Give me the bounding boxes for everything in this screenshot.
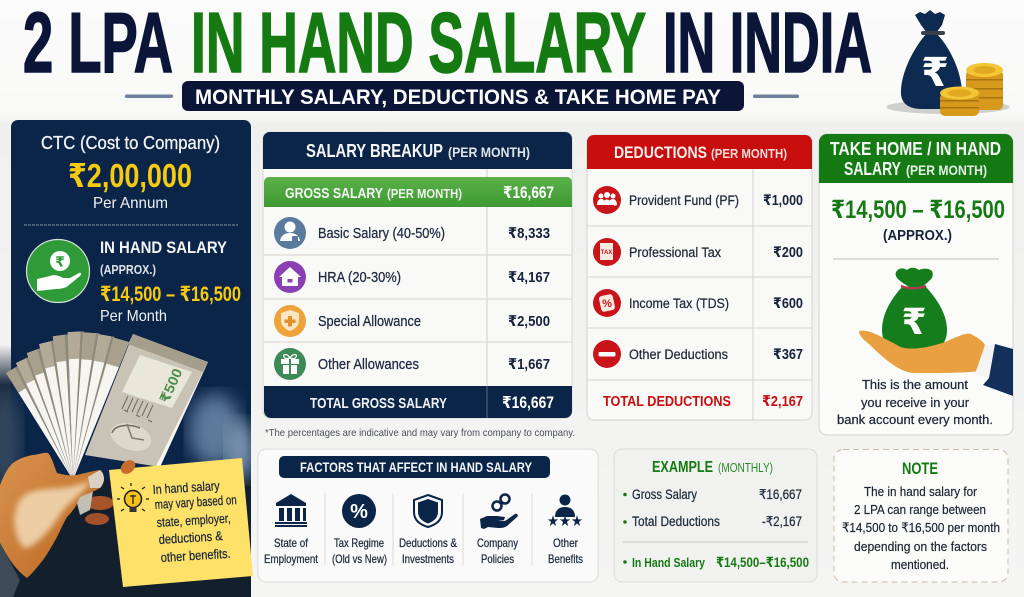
row: other deductions: Other Deductions: [629, 347, 728, 362]
callout: sticky note: other benefits.: [160, 546, 231, 565]
panel: monthly example: In Hand Salary: [632, 555, 706, 570]
factor: state of employment: [264, 494, 319, 566]
heading: [263, 132, 572, 169]
factor: company policies: Policies: [481, 552, 514, 566]
row: income tax: %: [602, 298, 612, 310]
heading: (PER MONTH): [906, 162, 987, 178]
row: income tax: [593, 289, 803, 317]
icon: hand with rupee: [26, 240, 90, 302]
row: other allowances: [274, 348, 550, 380]
factor: other benefits: [547, 494, 583, 566]
callout: sticky note: state, employer,: [156, 511, 231, 530]
total deductions row: [603, 393, 803, 410]
heading: (PER MONTH): [711, 146, 787, 161]
row: provident fund: ₹1,000: [763, 193, 803, 209]
panel: note: NOTE: [902, 459, 938, 478]
factor: company policies: Company: [477, 536, 518, 550]
panel: take home salary: [819, 134, 1013, 435]
heading: FACTORS THAT AFFECT IN HAND SALARY: [300, 460, 532, 475]
row: other allowances: Other Allowances: [318, 357, 419, 373]
panel: CTC and in hand summary: CTC (Cost to Company): [41, 132, 220, 153]
callout: sticky note: deductions &: [158, 528, 223, 547]
panel: monthly example: Gross Salary: [632, 487, 697, 502]
illustration: fan of rupee notes: ₹500: [156, 366, 185, 405]
callout: sticky note: may vary based on: [154, 492, 237, 512]
panel: monthly example: [614, 449, 817, 582]
panel: monthly example: EXAMPLE: [652, 459, 713, 476]
panel: CTC and in hand summary: IN HAND SALARY: [100, 238, 228, 257]
factor: tax regime: %: [350, 501, 368, 523]
factor: other benefits: ★★★: [547, 513, 583, 530]
panel: take home salary: (APPROX.): [883, 227, 952, 244]
row: basic salary: Basic Salary (40-50%): [318, 226, 445, 242]
factor: tax regime: Tax Regime: [334, 536, 384, 550]
heading: TAKE HOME / IN HAND: [830, 139, 1001, 159]
subtitle banner: [125, 81, 799, 111]
gross salary row: [264, 177, 572, 207]
panel: note: ₹14,500 to ₹16,500 per month: [842, 520, 1000, 535]
panel: monthly example: -₹2,167: [762, 514, 802, 529]
illustration: hand holding notes: [0, 453, 114, 597]
panel: CTC and in hand summary: ₹2,00,000: [68, 157, 192, 194]
panel: take home salary: bank account every month.: [837, 412, 993, 427]
gross salary row: (PER MONTH): [387, 187, 462, 201]
heading: SALARY: [844, 159, 901, 179]
panel: note: The in hand salary for: [864, 484, 978, 499]
panel: CTC and in hand summary: [0, 120, 254, 597]
row: provident fund: [593, 186, 803, 214]
panel: take home salary: you receive in your: [861, 395, 970, 410]
heading: DEDUCTIONS: [614, 143, 707, 162]
row: professional tax: [593, 238, 803, 266]
panel: note: 2 LPA can range between: [854, 502, 986, 517]
illustration: hand holding green money bag: ₹: [901, 301, 927, 342]
row: income tax: Income Tax (TDS): [629, 296, 729, 311]
factor: other benefits: Other: [553, 536, 578, 550]
heading: SALARY BREAKUP: [306, 141, 443, 161]
panel: monthly example: ₹14,500–₹16,500: [716, 554, 809, 570]
footnote: *The percentages are indicative and may vary from company to company.: [265, 427, 575, 439]
photo background: [0, 345, 254, 597]
icon: money bag with coins: [886, 10, 1010, 116]
total deductions row: ₹2,167: [762, 393, 803, 410]
row: special allowance: Special Allowance: [318, 314, 421, 330]
total gross row: TOTAL GROSS SALARY: [310, 395, 447, 412]
heading: [587, 135, 812, 169]
callout: sticky note: [109, 457, 253, 587]
row: special allowance: ₹2,500: [508, 313, 550, 330]
factor: deductions and investments: Investments: [402, 552, 454, 566]
row: other allowances: ₹1,667: [508, 356, 550, 373]
gross salary row: GROSS SALARY: [285, 185, 383, 202]
icon: hand with rupee: ₹: [55, 254, 65, 270]
panel: factors: [258, 449, 598, 582]
panel: monthly example: ₹16,667: [759, 487, 802, 502]
portrait on note: [107, 418, 155, 456]
row: other deductions: ₹367: [773, 347, 803, 363]
callout: sticky note: In hand salary: [152, 478, 220, 497]
row: HRA: HRA (20-30%): [318, 270, 401, 286]
illustration: hand holding green money bag: [859, 268, 1013, 396]
panel: CTC and in hand summary: (APPROX.): [100, 262, 156, 277]
panel: deductions: [587, 135, 812, 420]
illustration: fan of rupee notes: [6, 332, 208, 484]
row: income tax: ₹600: [773, 296, 803, 312]
panel: CTC and in hand summary: ₹14,500 – ₹16,500: [100, 283, 241, 306]
panel: CTC and in hand summary: Per Annum: [93, 195, 168, 212]
panel: take home salary: This is the amount: [862, 377, 968, 392]
factor: deductions and investments: [399, 495, 457, 566]
heading: [279, 456, 550, 478]
row: provident fund: Provident Fund (PF): [629, 193, 739, 208]
total gross row: ₹16,667: [502, 394, 554, 412]
heading: [819, 134, 1013, 183]
row: professional tax: Professional Tax: [629, 245, 721, 260]
front note: [85, 334, 208, 467]
panel: note: mentioned.: [891, 557, 949, 572]
gross salary row: ₹16,667: [503, 184, 554, 202]
factor: tax regime: (Old vs New): [332, 552, 387, 566]
row: professional tax: TAX: [601, 250, 612, 256]
subtitle banner: MONTHLY SALARY, DEDUCTIONS & TAKE HOME PAY: [195, 86, 721, 109]
total deductions row: TOTAL DEDUCTIONS: [603, 394, 731, 410]
row: basic salary: [274, 217, 550, 249]
row: basic salary: ₹8,333: [508, 225, 550, 242]
factor: other benefits: Benefits: [548, 552, 583, 566]
panel: monthly example: Total Deductions: [632, 514, 720, 529]
icon: light bulb: [117, 483, 149, 512]
panel: monthly example: (MONTHLY): [718, 461, 773, 475]
panel: salary breakup: [263, 132, 572, 418]
row: HRA: [274, 261, 550, 293]
row: other deductions: [593, 340, 803, 368]
heading: (PER MONTH): [448, 144, 530, 160]
row: special allowance: [274, 305, 550, 337]
row: HRA: ₹4,167: [508, 269, 550, 286]
panel: note: [834, 450, 1008, 582]
panel: CTC and in hand summary: Per Month: [100, 308, 167, 325]
factor: state of employment: Employment: [264, 552, 319, 566]
factor: state of employment: State of: [274, 536, 309, 550]
total gross row: [264, 386, 572, 418]
short coin stack: [940, 86, 979, 116]
icon: money bag with coins: ₹: [921, 51, 949, 95]
factor: company policies: [477, 494, 518, 566]
tall coin stack: [966, 63, 1003, 110]
row: professional tax: ₹200: [773, 245, 803, 261]
panel: note: depending on the factors: [854, 539, 987, 554]
factor: deductions and investments: Deductions &: [399, 536, 457, 550]
factor: tax regime: [332, 494, 387, 566]
